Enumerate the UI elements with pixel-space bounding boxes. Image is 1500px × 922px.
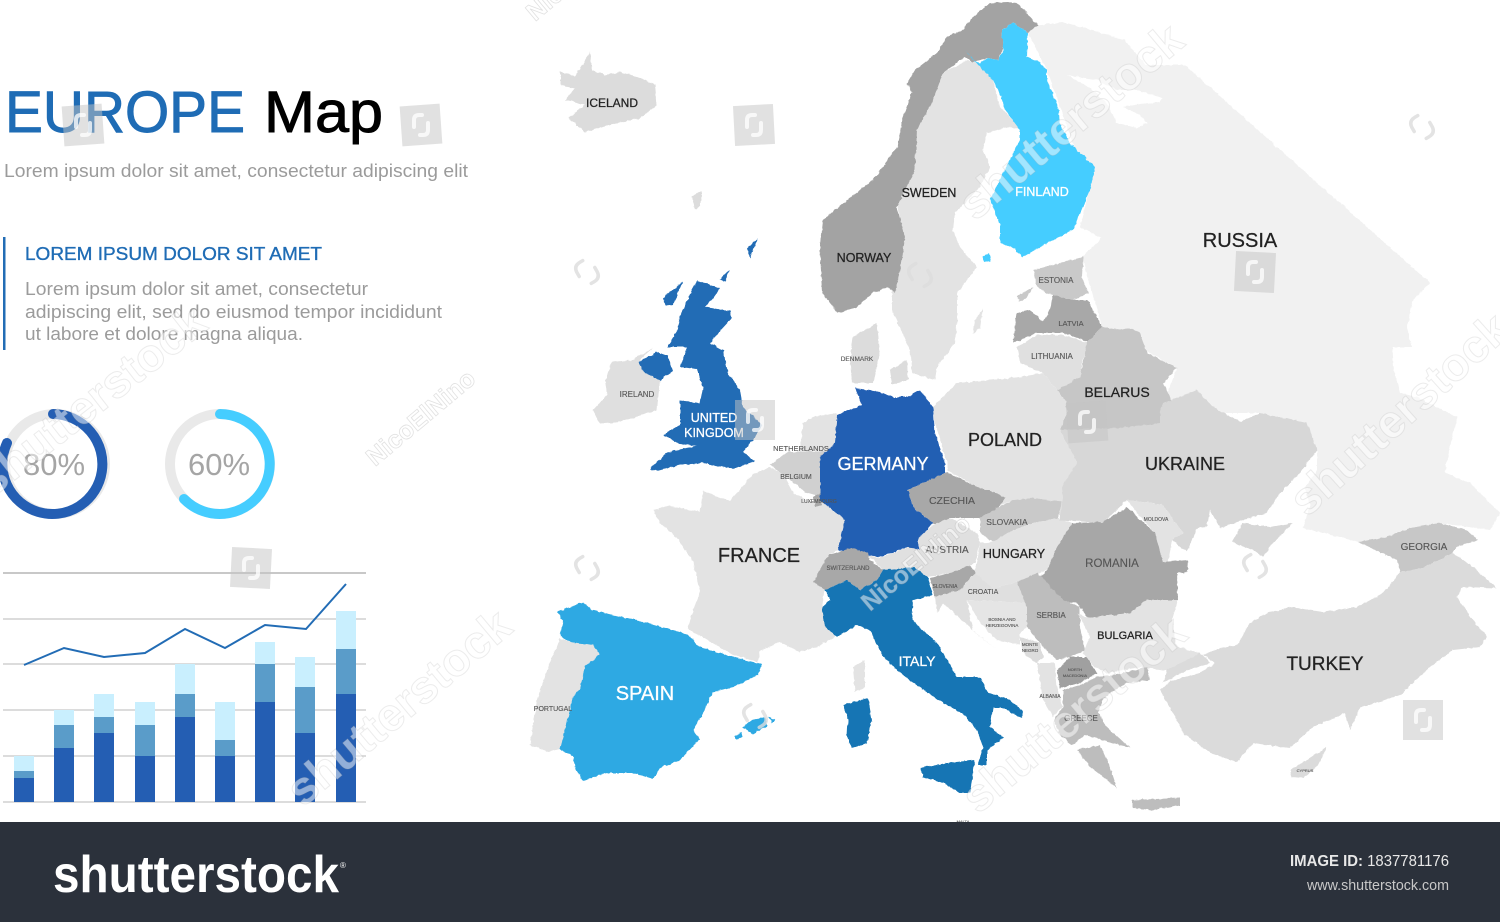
- map labels: ESTONIA: [1039, 276, 1074, 285]
- country: Moldova: [1127, 500, 1183, 563]
- map labels: MALTA: [957, 819, 970, 824]
- country: Ireland: [593, 348, 660, 424]
- watermark: shutterstock text: shutterstock: [276, 598, 521, 816]
- country: Germany: [820, 388, 945, 557]
- map labels: TURKEY: [1286, 654, 1364, 675]
- map labels: LATVIA: [1058, 319, 1084, 328]
- map labels: MACEDONIA: [1063, 673, 1087, 678]
- map labels: ROMANIA: [1085, 558, 1139, 570]
- country: United Kingdom: [638, 238, 762, 471]
- text block: lorem ipsum: ut labore et dolore magna aliqua.: [25, 324, 303, 344]
- country: Bosnia and Herzegovina: [967, 600, 1027, 645]
- map of Europe: [530, 2, 1500, 810]
- map labels: NEGRO: [1022, 648, 1039, 653]
- map labels: PORTUGAL: [534, 706, 572, 713]
- country: Portugal: [530, 638, 600, 752]
- country: Greece: [1054, 667, 1180, 810]
- bar and line chart: [3, 573, 366, 802]
- map labels: RUSSIA: [1203, 230, 1278, 252]
- country: Norway: [820, 2, 1038, 313]
- map labels: SWITZERLAND: [826, 566, 870, 572]
- country: Czechia: [908, 472, 1005, 527]
- watermark: author name: NicoElNino: [856, 509, 976, 617]
- map labels: SERBIA: [1036, 611, 1066, 620]
- map labels: BULGARIA: [1097, 630, 1153, 642]
- map labels: MONTE: [1022, 642, 1038, 647]
- map labels: DENMARK: [841, 356, 874, 363]
- country: Ukraine: [1060, 390, 1317, 552]
- country: Turkey: [1160, 553, 1497, 762]
- island: Corsica: [853, 660, 865, 692]
- country: Latvia: [1013, 295, 1102, 343]
- map labels: ICELAND: [586, 96, 638, 110]
- map labels: FINLAND: [1015, 185, 1069, 199]
- country: Romania: [1040, 507, 1188, 618]
- map labels: POLAND: [968, 430, 1042, 450]
- title: [5, 80, 383, 145]
- map labels: LITHUANIA: [1031, 352, 1074, 361]
- country: Russia: [1028, 22, 1500, 542]
- map labels: HERZEGOVINA: [986, 623, 1018, 628]
- map labels: HUNGARY: [983, 547, 1046, 561]
- country: Belgium: [770, 451, 828, 497]
- map labels: GREECE: [1064, 714, 1098, 723]
- map labels: NETHERLANDS: [773, 444, 829, 453]
- country: France: [653, 467, 845, 662]
- country: Croatia: [935, 573, 1027, 650]
- donut chart: 60%: [170, 414, 270, 514]
- country: Sweden: [892, 60, 1020, 380]
- footer bar: [0, 822, 1500, 922]
- country: Bulgaria: [1078, 600, 1200, 673]
- country: Iceland: [560, 52, 657, 132]
- donut chart: 60%: 60%: [188, 447, 250, 482]
- watermark: shutterstock text: shutterstock: [951, 605, 1196, 823]
- map labels: FRANCE: [718, 545, 800, 567]
- country: Albania: [1037, 663, 1062, 717]
- map labels: ITALY: [899, 653, 936, 669]
- watermark: shutterstock text: shutterstock: [948, 12, 1193, 230]
- country: Serbia: [1017, 573, 1085, 660]
- map labels: SLOVENIA: [932, 584, 958, 590]
- country: Luxembourg: [813, 493, 822, 507]
- map labels: BELARUS: [1084, 384, 1150, 400]
- map labels: UNITED: [691, 411, 737, 425]
- map labels: CROATIA: [968, 589, 999, 596]
- donut chart: 80%: [2, 414, 105, 514]
- country: Montenegro: [1020, 637, 1043, 663]
- text block: lorem ipsum: adipiscing elit, sed do eiusmod tempor incididunt: [25, 302, 442, 322]
- map labels: KINGDOM: [684, 426, 744, 440]
- map labels: BOSNIA AND: [988, 617, 1016, 622]
- title: Map: [264, 80, 383, 145]
- map labels: IRELAND: [620, 390, 655, 399]
- country: Slovenia: [930, 565, 975, 597]
- watermark: author name: [361, 0, 976, 617]
- country: Spain: [557, 602, 775, 781]
- country: Finland: [965, 23, 1095, 262]
- watermark: author name: NicoElNino: [361, 364, 481, 472]
- country: Slovakia: [980, 498, 1062, 542]
- map labels: SWEDEN: [902, 186, 956, 200]
- map labels: AUSTRIA: [925, 545, 969, 556]
- footer logo: ®: [340, 861, 346, 870]
- map labels: [534, 96, 1448, 824]
- country: Estonia: [1017, 257, 1088, 302]
- country: Denmark: [850, 323, 908, 384]
- map labels: UKRAINE: [1145, 454, 1225, 474]
- subtitle: Lorem ipsum dolor sit amet, consectetur adipiscing elit: [4, 161, 468, 181]
- text block: lorem ipsum: LOREM IPSUM DOLOR SIT AMET: [25, 243, 322, 264]
- country: Austria: [868, 518, 980, 577]
- country: Netherlands: [800, 413, 837, 452]
- map labels: SPAIN: [616, 683, 674, 705]
- country: Lithuania: [1017, 335, 1088, 390]
- watermark: small logo marks: [76, 115, 1430, 730]
- map labels: SLOVAKIA: [986, 517, 1028, 527]
- map labels: CYPRUS: [1297, 768, 1314, 773]
- map labels: NORTH: [1068, 667, 1082, 672]
- website: www.shutterstock.com: [1306, 877, 1449, 894]
- map labels: NORWAY: [837, 251, 892, 265]
- map labels: CZECHIA: [929, 495, 975, 507]
- white sea: [1067, 75, 1162, 128]
- country: Hungary: [973, 518, 1072, 588]
- donut chart: 80%: 80%: [23, 447, 85, 482]
- map labels: LUXEMBOURG: [801, 499, 837, 505]
- country: North Macedonia: [1057, 657, 1097, 688]
- country: Cyprus: [1290, 747, 1327, 778]
- title: EUROPE: [5, 80, 245, 145]
- country: Italy: [822, 567, 1023, 793]
- map labels: BELGIUM: [780, 474, 812, 481]
- map labels: GERMANY: [837, 454, 929, 474]
- island: Faroe: [692, 191, 702, 210]
- country: Poland: [933, 373, 1077, 517]
- country: Switzerland: [813, 548, 883, 590]
- country: Belarus: [1057, 327, 1177, 430]
- text block: lorem ipsum: Lorem ipsum dolor sit amet, consectetur: [25, 279, 368, 299]
- text block: lorem ipsum: [3, 237, 442, 350]
- map labels: MOLDOVA: [1144, 517, 1169, 523]
- country: Crimea: [1232, 523, 1293, 557]
- country: Georgia: [1358, 523, 1478, 572]
- map labels: ALBANIA: [1039, 694, 1061, 700]
- footer logo: shutterstock: [53, 846, 339, 904]
- image id: IMAGE ID: 1837781176: [1290, 853, 1449, 870]
- map labels: GEORGIA: [1401, 542, 1448, 553]
- watermark: grey squares: [62, 104, 1443, 740]
